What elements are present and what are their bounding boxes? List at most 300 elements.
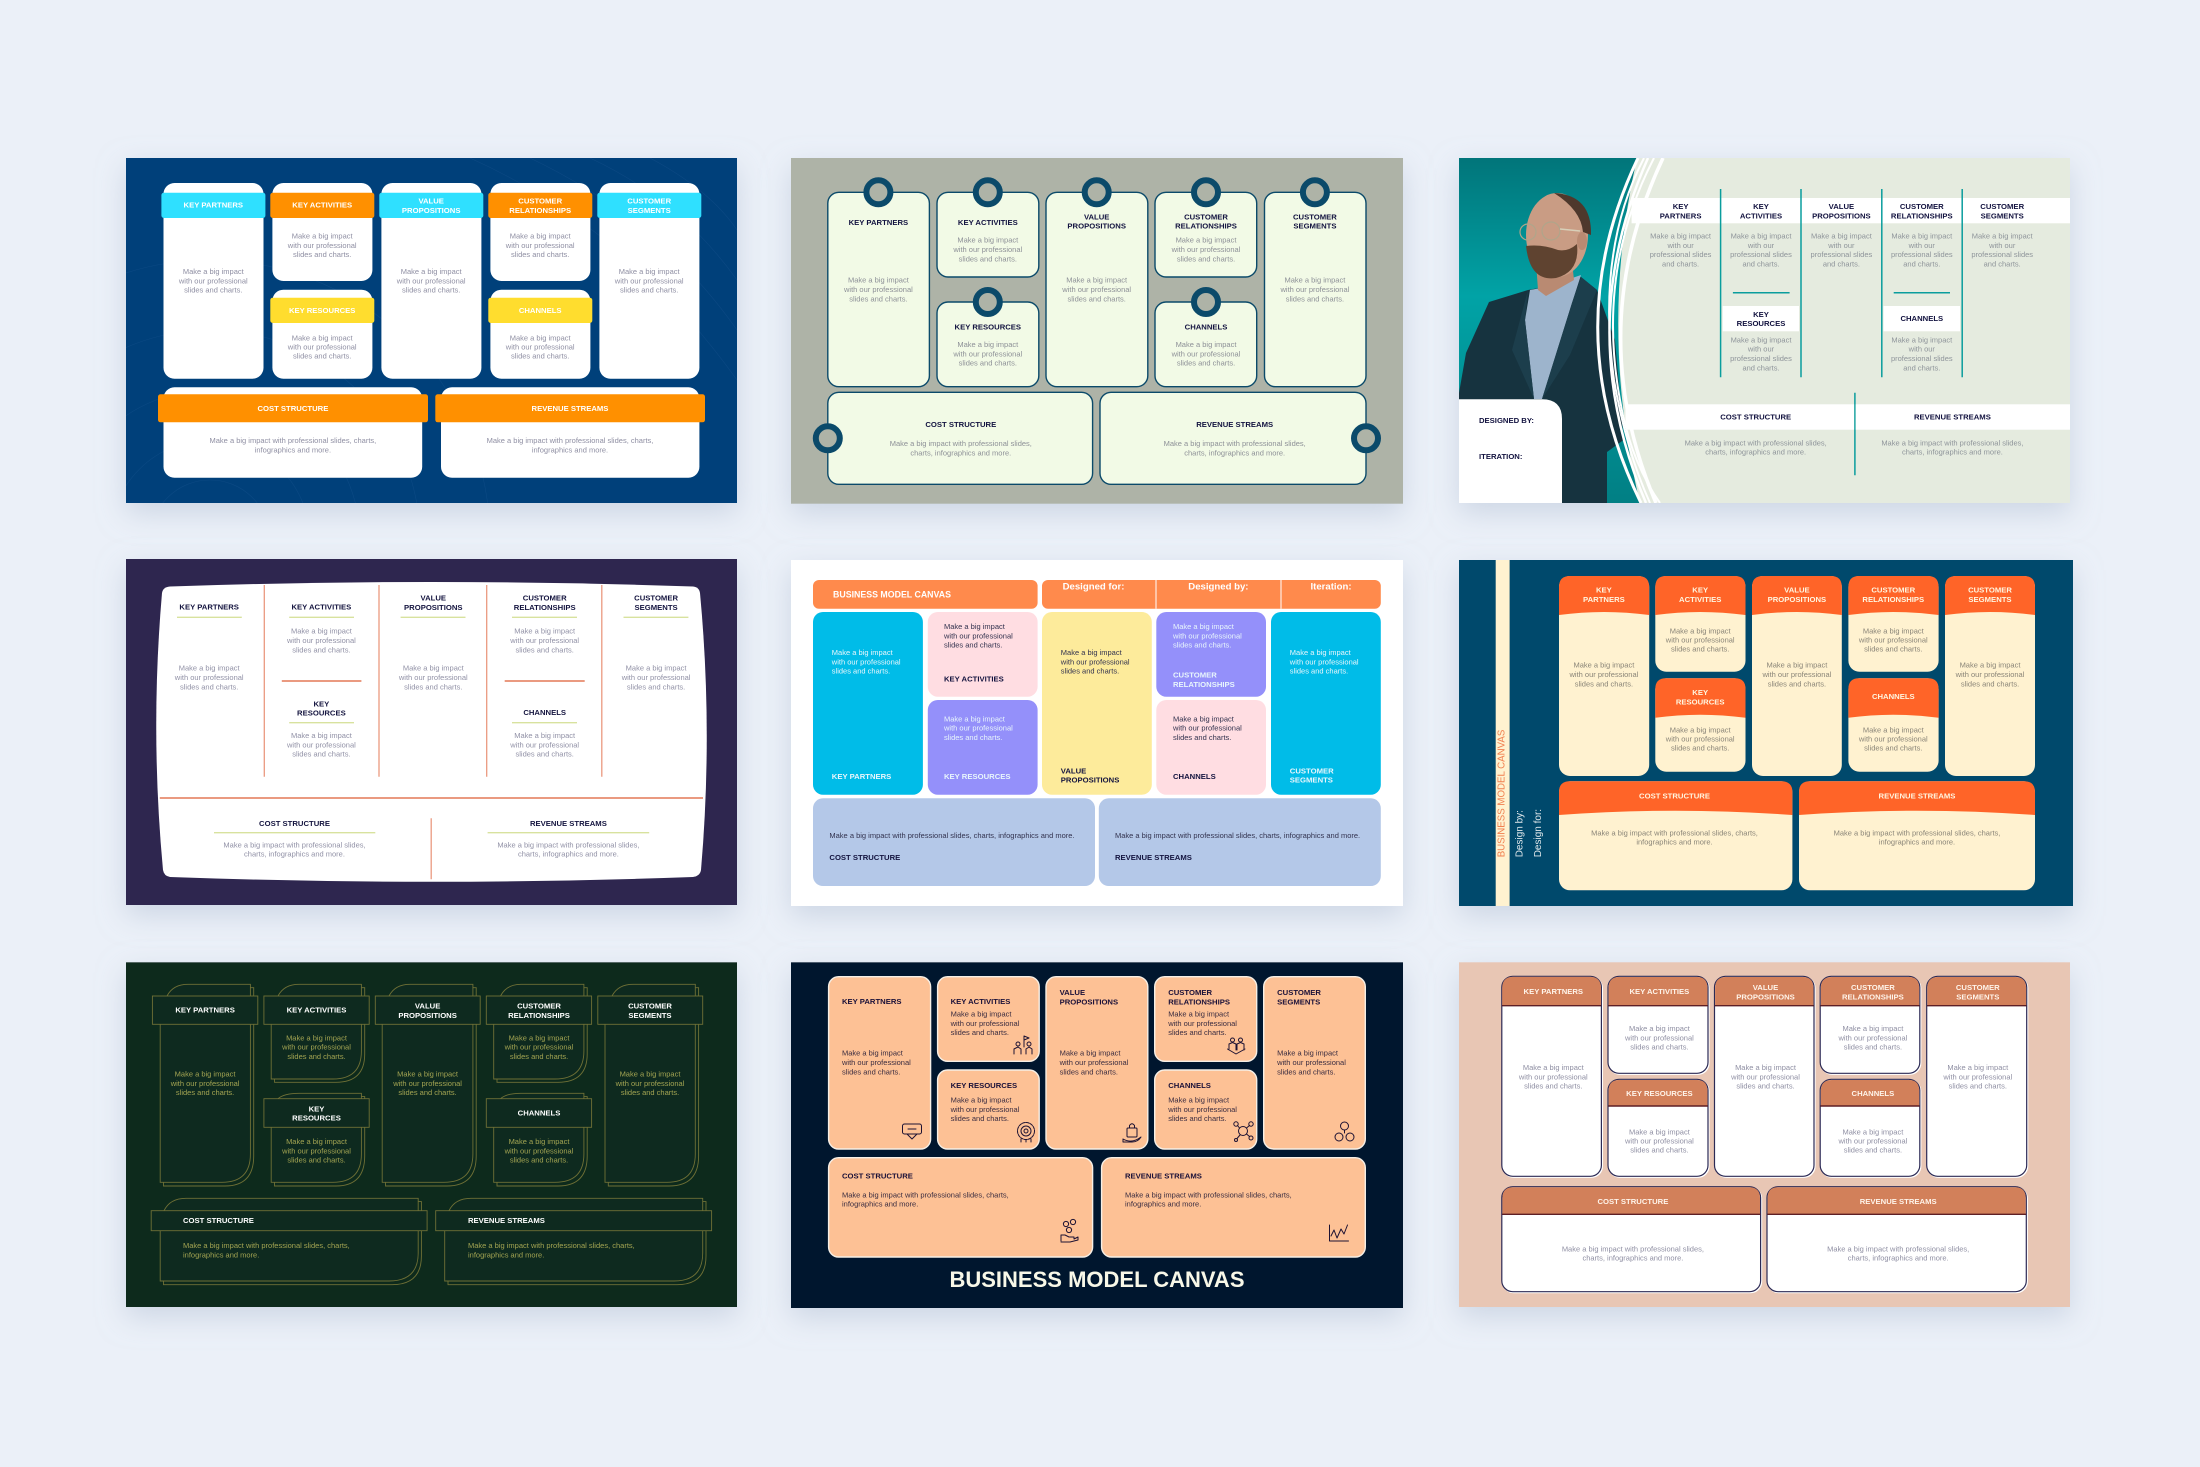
block: key activities: Make a big impact xyxy=(291,626,353,635)
block: customer segments: Make a big impact xyxy=(626,663,687,672)
block: customer relationships: slides and charts. xyxy=(516,645,574,654)
card: value propositions: PROPOSITIONS xyxy=(398,1010,457,1020)
card: customer segments: Make a big impact xyxy=(1290,648,1352,656)
card: cost structure xyxy=(1502,1187,1761,1292)
card: key resources: Make a big impact xyxy=(286,1136,348,1146)
card: key partners: KEY PARTNERS xyxy=(842,997,902,1006)
card: key resources xyxy=(937,290,1039,387)
card: revenue streams: charts, infographics and more. xyxy=(1848,1253,1949,1262)
card: channels xyxy=(1820,1079,1920,1176)
block: cost structure: charts, infographics and more. xyxy=(244,849,345,858)
card: key resources: RESOURCES xyxy=(292,1113,341,1122)
block: channels: Make a big impact xyxy=(514,730,576,740)
card: customer relationships: with our professional xyxy=(1858,635,1928,644)
vertical labels: Design by: xyxy=(1514,810,1525,857)
slide 8 background xyxy=(791,962,1403,1308)
card: value propositions: Make a big impact xyxy=(401,266,463,276)
block: value propositions: with our professional xyxy=(398,672,468,682)
panel: slide 5 colourful canvas xyxy=(791,560,1403,906)
card: key partners: slides and charts. xyxy=(184,285,242,294)
card: key partners: KEY PARTNERS xyxy=(832,772,891,781)
card: revenue streams: REVENUE STREAMS xyxy=(532,404,608,413)
card: customer segments: SEGMENTS xyxy=(628,206,671,214)
card: customer relationships: slides and charts. xyxy=(1173,640,1231,649)
block: customer relationships: with our professional xyxy=(509,636,579,644)
block: cost structure: Make a big impact with professional slides, xyxy=(223,840,366,849)
icon: hand with coins xyxy=(1061,1219,1078,1242)
card: key activities: Make a big impact xyxy=(292,231,354,240)
card: key activities: Make a big impact xyxy=(944,622,1006,630)
column: key activities: professional slides xyxy=(1730,250,1792,258)
card: key resources: slides and charts. xyxy=(951,1114,1009,1122)
card: value propositions xyxy=(1042,612,1152,795)
panel: slide 4 indigo canvas xyxy=(126,559,737,905)
card: channels xyxy=(486,1093,592,1186)
card: customer relationships: Make a big impact xyxy=(509,1033,570,1042)
section: revenue streams: charts, infographics and more. xyxy=(1902,447,2003,456)
card: key partners: Make a big impact xyxy=(183,266,245,276)
column: customer segments: CUSTOMER xyxy=(1980,202,2025,210)
card: customer segments: with our professional xyxy=(615,1078,685,1088)
card: value propositions xyxy=(379,183,483,379)
block: key activities xyxy=(286,602,356,654)
column: customer relationships: RELATIONSHIPS xyxy=(1891,211,1953,220)
column: key resources: and charts. xyxy=(1742,363,1780,372)
column: customer relationships: with our xyxy=(1908,240,1935,250)
card: value propositions: slides and charts. xyxy=(398,1088,457,1096)
card: value propositions: slides and charts. xyxy=(1068,294,1126,303)
card: customer relationships: CUSTOMER xyxy=(1871,585,1916,594)
card: value propositions xyxy=(1046,180,1148,387)
card: key partners xyxy=(1559,576,1649,776)
card: revenue streams: Make a big impact with professional slides, charts, xyxy=(468,1240,635,1250)
card: key partners: with our professional xyxy=(831,657,901,666)
icon: hand with shopping bag xyxy=(1123,1124,1141,1142)
block: key resources xyxy=(286,699,356,758)
card: key activities: slides and charts. xyxy=(1671,644,1729,653)
panel: slide 1 blue canvas xyxy=(118,158,746,522)
card: channels xyxy=(1155,1070,1257,1149)
card: cost structure xyxy=(151,1198,427,1285)
card: value propositions: PROPOSITIONS xyxy=(1060,997,1118,1006)
header: designed for, designed by, iteration: Designed for: xyxy=(1063,582,1124,592)
card: customer segments: Make a big impact xyxy=(620,1069,681,1078)
card: key resources xyxy=(928,700,1038,795)
card: key partners: slides and charts. xyxy=(176,1088,234,1096)
panel: slide 7 dark green outlined canvas xyxy=(126,962,737,1307)
card: value propositions: slides and charts. xyxy=(402,285,460,294)
slide 2 background xyxy=(791,158,1403,504)
card: cost structure: Make a big impact with professional slides, charts, xyxy=(1591,828,1758,837)
card: key partners: slides and charts. xyxy=(849,294,908,303)
big title: BUSINESS MODEL CANVAS xyxy=(949,1267,1245,1292)
header: designed for, designed by, iteration: Iteration: xyxy=(1310,582,1352,592)
block: customer relationships: Make a big impact xyxy=(514,626,576,635)
card: customer segments: with our professional xyxy=(1276,1058,1346,1066)
card: customer relationships: RELATIONSHIPS xyxy=(1842,992,1904,1001)
card: channels: CHANNELS xyxy=(1852,1089,1894,1098)
card: revenue streams: REVENUE STREAMS xyxy=(1860,1197,1937,1206)
card: value propositions: PROPOSITIONS xyxy=(1736,992,1795,1001)
block: revenue streams: REVENUE STREAMS xyxy=(530,819,607,828)
card: key resources: slides and charts. xyxy=(944,732,1002,742)
block: key activities: slides and charts. xyxy=(292,645,351,654)
block: key partners: slides and charts. xyxy=(180,682,238,691)
block: key resources: slides and charts. xyxy=(292,749,351,758)
card: customer relationships: RELATIONSHIPS xyxy=(1175,221,1237,230)
column: key partners: Make a big impact xyxy=(1650,231,1712,240)
card: key activities: with our professional xyxy=(281,1042,351,1051)
card: customer relationships: with our professional xyxy=(1172,631,1242,640)
card: cost structure: infographics and more. xyxy=(842,1199,918,1208)
card: customer segments: CUSTOMER xyxy=(627,196,672,205)
card: cost structure: COST STRUCTURE xyxy=(842,1172,913,1180)
column: customer segments xyxy=(1962,198,2070,268)
card: key activities: Make a big impact xyxy=(1670,626,1732,635)
card: key activities: KEY ACTIVITIES xyxy=(958,218,1018,227)
card: customer segments: CUSTOMER xyxy=(1277,988,1321,996)
card: value propositions: with our professional xyxy=(1762,670,1832,678)
card: key resources: slides and charts. xyxy=(1630,1145,1689,1154)
card: key activities: KEY ACTIVITIES xyxy=(944,674,1004,684)
card: revenue streams: infographics and more. xyxy=(1125,1199,1201,1208)
column: customer relationships: CUSTOMER xyxy=(1900,202,1944,210)
card: customer relationships: with our professional xyxy=(504,1042,574,1051)
card: value propositions: VALUE xyxy=(1061,766,1086,775)
card: value propositions xyxy=(1752,576,1842,776)
card: revenue streams: charts, infographics and more. xyxy=(1184,448,1285,457)
card: revenue streams xyxy=(436,1198,712,1285)
column: key resources: Make a big impact xyxy=(1731,335,1792,344)
card: revenue streams xyxy=(1767,1187,2026,1292)
card: customer segments: SEGMENTS xyxy=(628,1010,672,1020)
section: revenue streams xyxy=(1856,404,2070,456)
card: value propositions: slides and charts. xyxy=(1768,679,1826,688)
card: key activities: slides and charts. xyxy=(287,1052,346,1060)
card: channels: Make a big impact xyxy=(1842,1127,1904,1136)
card: channels: with our professional xyxy=(1167,1104,1237,1114)
card: revenue streams: infographics and more. xyxy=(532,445,608,454)
card: customer relationships: with our professional xyxy=(1171,244,1241,254)
column: customer segments: with our xyxy=(1988,240,2016,250)
card: key partners: KEY PARTNERS xyxy=(175,1006,235,1014)
card: customer relationships xyxy=(1820,976,1920,1073)
card: key partners: Make a big impact xyxy=(832,648,894,656)
block: key partners: Make a big impact xyxy=(179,663,241,672)
block: key partners: with our professional xyxy=(174,672,244,682)
card: channels: slides and charts. xyxy=(1168,1114,1227,1122)
block: customer relationships xyxy=(509,593,579,654)
column: key resources: professional slides xyxy=(1730,354,1792,362)
card: customer segments: slides and charts. xyxy=(1277,1067,1335,1076)
icon: target gear xyxy=(1018,1122,1034,1142)
card: customer segments xyxy=(1945,576,2035,776)
card: value propositions: slides and charts. xyxy=(1060,1067,1118,1076)
card: key activities: slides and charts. xyxy=(959,254,1017,263)
card: value propositions: PROPOSITIONS xyxy=(402,206,460,214)
column: value propositions: and charts. xyxy=(1823,259,1860,268)
card: channels: Make a big impact xyxy=(510,333,572,342)
card: key resources: with our professional xyxy=(952,349,1023,358)
card: revenue streams xyxy=(1100,392,1378,484)
card: key partners: KEY PARTNERS xyxy=(849,218,908,227)
card: key resources: KEY RESOURCES xyxy=(951,1081,1017,1090)
card: customer relationships xyxy=(1156,612,1266,697)
card: key resources: with our professional xyxy=(943,723,1013,732)
portrait area with teal backdrop and man in suit xyxy=(1459,158,1663,503)
card: customer relationships: RELATIONSHIPS xyxy=(508,1010,570,1020)
vertical title: BUSINESS MODEL CANVAS xyxy=(1497,729,1508,857)
column: customer segments: professional slides xyxy=(1971,250,2033,258)
card: key partners: with our professional xyxy=(841,1058,911,1066)
card: revenue streams: Make a big impact with professional slides, charts, infographics and more. xyxy=(1115,831,1360,840)
block: revenue streams: charts, infographics and more. xyxy=(518,849,619,858)
icon: three segment circles xyxy=(1335,1122,1354,1141)
slide 7 background xyxy=(126,962,737,1307)
card: key resources: Make a big impact xyxy=(944,714,1006,723)
card: customer relationships: CUSTOMER xyxy=(1184,212,1228,221)
section: revenue streams: Make a big impact with professional slides, xyxy=(1881,438,2023,447)
card: channels xyxy=(1848,678,1939,772)
card: value propositions xyxy=(1714,976,1814,1176)
section: revenue streams: REVENUE STREAMS xyxy=(1914,412,1991,422)
card: key activities: slides and charts. xyxy=(951,1028,1009,1036)
card: channels: slides and charts. xyxy=(1864,743,1922,752)
column: channels xyxy=(1884,306,1960,372)
card: cost structure: Make a big impact with professional slides, xyxy=(890,438,1032,448)
card: key partners: KEY PARTNERS xyxy=(184,200,243,210)
card: value propositions: PROPOSITIONS xyxy=(1061,775,1119,784)
card: channels: with our professional xyxy=(1838,1136,1908,1145)
card: customer segments: slides and charts. xyxy=(1290,666,1348,675)
card: cost structure xyxy=(829,1158,1093,1257)
slide 4 background xyxy=(126,559,737,905)
card: channels: CHANNELS xyxy=(1872,692,1915,701)
card: key resources xyxy=(1655,678,1746,772)
card: revenue streams xyxy=(1799,781,2035,890)
card: value propositions: Make a big impact xyxy=(397,1069,459,1078)
card: cost structure: COST STRUCTURE xyxy=(257,404,328,413)
card: value propositions: VALUE xyxy=(1060,988,1085,996)
card: key partners: Make a big impact xyxy=(842,1048,904,1057)
card: customer segments: slides and charts. xyxy=(1286,294,1344,303)
block: value propositions: VALUE xyxy=(421,593,446,602)
card: customer relationships: RELATIONSHIPS xyxy=(509,206,571,214)
column: key activities: and charts. xyxy=(1742,259,1780,268)
card: key resources xyxy=(264,1093,369,1186)
card: customer relationships: Make a big impact xyxy=(1863,626,1925,635)
card: value propositions: Make a big impact xyxy=(1060,1048,1121,1057)
card: key resources: with our professional xyxy=(287,342,357,351)
card: key resources: RESOURCES xyxy=(1676,697,1725,706)
card: cost structure xyxy=(158,387,428,478)
card: key partners xyxy=(1502,976,1601,1176)
card: key resources: slides and charts. xyxy=(293,351,351,360)
block: revenue streams: Make a big impact with professional slides, xyxy=(497,840,639,849)
panel: slide 2 sage canvas with rings xyxy=(791,158,1403,504)
card: customer relationships: CUSTOMER xyxy=(517,1001,561,1010)
header: designed for, designed by, iteration xyxy=(1042,580,1381,609)
card: key activities: Make a big impact xyxy=(957,235,1019,244)
column: key partners: with our xyxy=(1666,240,1694,250)
card: customer relationships: with our professional xyxy=(1167,1018,1237,1028)
card: channels: CHANNELS xyxy=(1173,772,1216,781)
card: key resources: with our professional xyxy=(950,1104,1020,1114)
card: key activities: KEY ACTIVITIES xyxy=(292,200,352,210)
card: key partners xyxy=(829,977,931,1149)
card: channels: Make a big impact xyxy=(1176,340,1237,348)
card: key activities xyxy=(1608,976,1708,1073)
column: customer segments: Make a big impact xyxy=(1972,231,2034,240)
column: key resources: RESOURCES xyxy=(1737,318,1785,328)
card: cost structure: infographics and more. xyxy=(1636,837,1713,846)
card: channels: with our professional xyxy=(1171,349,1241,358)
card: customer relationships xyxy=(1155,180,1257,277)
column: value propositions: PROPOSITIONS xyxy=(1812,211,1871,220)
card: value propositions: with our professional xyxy=(1060,657,1130,666)
block: key activities: with our professional xyxy=(286,636,356,644)
card: customer segments xyxy=(598,984,703,1186)
card: customer segments: with our professional xyxy=(1280,284,1350,294)
card: customer relationships: Make a big impact xyxy=(1173,622,1235,630)
card: cost structure: charts, infographics and more. xyxy=(910,448,1011,457)
card: key partners xyxy=(813,612,923,795)
card: key partners xyxy=(152,984,258,1186)
card: customer relationships xyxy=(486,984,592,1082)
card: key partners: with our professional xyxy=(178,276,248,285)
card: key resources: KEY xyxy=(1692,688,1708,696)
column: key activities: Make a big impact xyxy=(1731,231,1792,240)
column: key activities xyxy=(1721,198,1801,268)
card: value propositions: VALUE xyxy=(1753,982,1778,992)
card: key activities: with our professional xyxy=(1665,635,1735,644)
block: value propositions xyxy=(398,593,468,691)
card: value propositions: slides and charts. xyxy=(1736,1081,1795,1090)
column: key partners: professional slides xyxy=(1650,250,1712,258)
card: key activities: Make a big impact xyxy=(1629,1024,1691,1032)
card: channels: Make a big impact xyxy=(1863,725,1925,734)
block: channels xyxy=(509,708,579,758)
card: key resources: slides and charts. xyxy=(959,358,1017,367)
card: revenue streams: REVENUE STREAMS xyxy=(468,1216,545,1225)
card: customer segments: Make a big impact xyxy=(1960,660,2021,669)
card: customer segments: with our professional xyxy=(1955,670,2025,678)
panel: slide 3 portrait canvas xyxy=(1459,158,2070,503)
card: channels: with our professional xyxy=(504,1146,574,1155)
card: channels: with our professional xyxy=(1172,723,1242,732)
card: customer relationships: slides and charts. xyxy=(1844,1042,1902,1051)
card: key activities: KEY xyxy=(1692,585,1708,594)
column: value propositions: VALUE xyxy=(1829,202,1854,210)
block: key partners: KEY PARTNERS xyxy=(179,602,239,612)
card: cost structure: COST STRUCTURE xyxy=(183,1216,254,1225)
column: channels: and charts. xyxy=(1903,363,1940,372)
card: key resources: KEY RESOURCES xyxy=(1626,1089,1693,1098)
card: channels xyxy=(488,290,592,379)
card: channels: CHANNELS xyxy=(519,306,562,315)
column: key resources: KEY xyxy=(1753,310,1769,318)
card: revenue streams: REVENUE STREAMS xyxy=(1879,792,1955,800)
card: value propositions: with our professional xyxy=(1059,1058,1129,1066)
card: channels: Make a big impact xyxy=(1168,1095,1230,1104)
cream side band xyxy=(1496,560,1510,906)
curved white board xyxy=(156,582,707,882)
card: key activities: slides and charts. xyxy=(1630,1042,1689,1051)
block: channels: slides and charts. xyxy=(516,749,574,758)
card: revenue streams: Make a big impact with professional slides, charts, xyxy=(1834,828,2000,837)
column: channels: professional slides xyxy=(1891,354,1953,362)
card: key resources: KEY RESOURCES xyxy=(944,772,1010,781)
card: customer relationships: RELATIONSHIPS xyxy=(1168,997,1230,1006)
card: channels: slides and charts. xyxy=(1173,732,1231,742)
card: key activities: KEY ACTIVITIES xyxy=(287,1006,346,1014)
card: cost structure: Make a big impact with professional slides, charts, xyxy=(210,436,376,444)
card: customer segments xyxy=(1264,977,1365,1149)
card: revenue streams xyxy=(1099,798,1381,886)
section: cost structure: charts, infographics and more. xyxy=(1705,447,1806,456)
block: key resources: Make a big impact xyxy=(291,730,353,740)
card: customer segments: with our professional xyxy=(1942,1072,2013,1081)
column: key resources: with our xyxy=(1747,344,1775,353)
card: customer segments: slides and charts. xyxy=(1949,1081,2007,1090)
card: customer segments: slides and charts. xyxy=(621,1088,679,1096)
column: value propositions: with our xyxy=(1827,240,1855,250)
card: value propositions: with our professional xyxy=(1061,284,1131,294)
block: customer segments xyxy=(621,593,691,691)
card: customer segments xyxy=(1927,976,2027,1176)
card: key activities: slides and charts. xyxy=(944,640,1002,649)
block: customer segments: with our professional xyxy=(621,672,691,682)
card: key activities xyxy=(928,612,1038,697)
card: customer segments xyxy=(1264,180,1366,387)
card: revenue streams: Make a big impact with professional slides, xyxy=(1827,1244,1969,1253)
header: business model canvas: BUSINESS MODEL CANVAS xyxy=(833,589,951,599)
card: key resources: slides and charts. xyxy=(1671,743,1729,752)
column: key partners: and charts. xyxy=(1662,259,1699,268)
card: cost structure: infographics and more. xyxy=(255,445,331,454)
card: channels xyxy=(1155,290,1257,387)
card: value propositions: VALUE xyxy=(415,1001,440,1010)
card: customer relationships: slides and charts. xyxy=(1177,254,1235,263)
block: key resources: RESOURCES xyxy=(297,708,346,717)
card: channels: slides and charts. xyxy=(1844,1145,1902,1154)
vertical labels: Design for: xyxy=(1533,809,1544,857)
card: channels: slides and charts. xyxy=(1177,358,1235,367)
card: key activities: with our professional xyxy=(952,244,1023,254)
card: cost structure: Make a big impact with professional slides, charts, infographics and more. xyxy=(829,831,1075,840)
card: cost structure: Make a big impact with professional slides, xyxy=(1562,1244,1704,1253)
card: revenue streams: REVENUE STREAMS xyxy=(1115,853,1192,862)
card: customer segments: CUSTOMER xyxy=(1290,766,1334,775)
card: customer segments: CUSTOMER xyxy=(628,1001,672,1010)
slide 9 background xyxy=(1459,962,2070,1307)
card: customer segments: slides and charts. xyxy=(620,285,678,294)
card: key partners: KEY xyxy=(1596,585,1612,594)
column: channels: Make a big impact xyxy=(1891,335,1953,344)
card: customer relationships: RELATIONSHIPS xyxy=(1173,680,1235,688)
card: channels xyxy=(1156,700,1266,795)
card: customer segments: slides and charts. xyxy=(1961,679,2019,688)
card: customer segments: with our professional xyxy=(1289,657,1359,666)
slide 1 background xyxy=(126,158,737,503)
card: key partners: Make a big impact xyxy=(848,275,910,284)
card: key resources xyxy=(1608,1079,1708,1176)
card: key activities xyxy=(1655,576,1746,672)
card: key activities: Make a big impact xyxy=(286,1033,348,1042)
column: key activities: KEY xyxy=(1753,202,1769,210)
card: customer segments: Make a big impact xyxy=(1277,1048,1339,1057)
header: business model canvas xyxy=(813,580,1038,609)
